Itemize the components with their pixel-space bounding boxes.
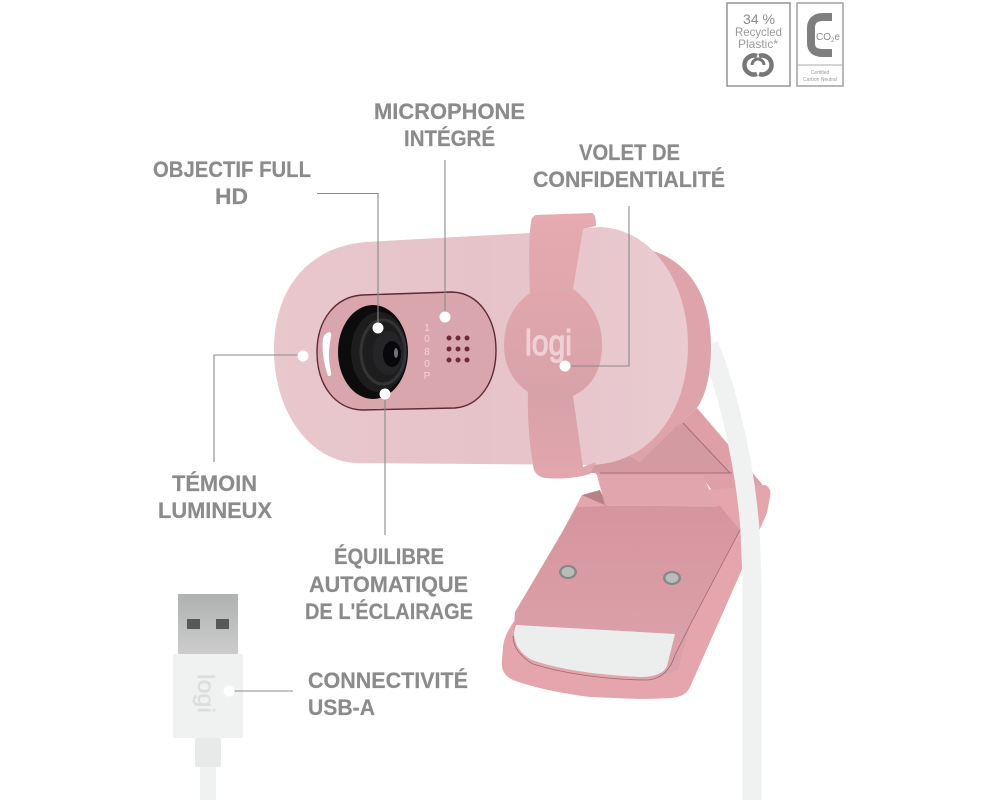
privacy shutter <box>504 213 602 478</box>
badge: 34% recycled plastic: Recycled <box>735 25 782 39</box>
callout lines <box>214 160 629 691</box>
label: privacy shutter: VOLET DE <box>579 140 680 165</box>
label: usb-a: USB-A <box>308 695 375 720</box>
cable <box>200 765 216 800</box>
plug housing <box>173 654 243 738</box>
stand base <box>502 485 770 699</box>
lens panel <box>317 292 496 410</box>
badge: carbon neutral: Certified <box>811 70 830 76</box>
1080P label <box>424 323 431 382</box>
front shell <box>274 227 688 465</box>
label: light: TÉMOIN <box>172 471 257 496</box>
callout dots <box>224 312 570 696</box>
label: microphone: INTÉGRÉ <box>404 126 495 151</box>
label: auto light balance: AUTOMATIQUE <box>309 572 468 597</box>
label: microphone: MICROPHONE <box>374 99 525 124</box>
label: light: LUMINEUX <box>158 498 272 523</box>
1080P label: 0 <box>424 359 430 370</box>
microphone holes <box>446 336 470 362</box>
1080P label: P <box>424 371 431 382</box>
logi logo: logi <box>193 674 219 713</box>
strain relief <box>195 738 221 767</box>
label: lens: OBJECTIF FULL <box>153 157 311 182</box>
label: usb-a <box>308 668 468 720</box>
logi logo: logi <box>525 322 572 363</box>
badge: carbon neutral: e <box>834 32 840 43</box>
cable <box>709 345 752 800</box>
label: usb-a: CONNECTIVITÉ <box>308 668 468 693</box>
label: auto light balance: ÉQUILIBRE <box>334 544 444 569</box>
rear body <box>600 250 711 462</box>
webcam <box>274 213 770 800</box>
badge: 34% recycled plastic: 34 % <box>743 11 775 27</box>
badge: carbon neutral: Carbon Neutral <box>803 77 837 83</box>
usb-a connector <box>173 594 243 800</box>
stand arm <box>587 408 765 506</box>
1080P label: 8 <box>424 347 430 358</box>
metal plug <box>178 594 238 654</box>
badge: carbon neutral: CO <box>816 32 831 43</box>
badge: 34% recycled plastic: Plastic* <box>738 37 778 51</box>
badge: carbon neutral <box>797 3 843 86</box>
label: privacy shutter <box>533 140 725 192</box>
label: auto light balance <box>305 544 473 624</box>
label: auto light balance: DE L'ÉCLAIRAGE <box>305 599 473 624</box>
label: privacy shutter: CONFIDENTIALITÉ <box>533 167 725 192</box>
label: light <box>158 471 272 523</box>
badge: 34% recycled plastic <box>727 3 790 86</box>
screws <box>559 565 681 585</box>
label: lens: HD <box>215 184 248 209</box>
label: lens <box>153 157 311 209</box>
hinge <box>597 475 717 507</box>
label: microphone <box>374 99 525 151</box>
anti-slip pad <box>514 625 675 677</box>
lens <box>338 305 408 399</box>
status light <box>323 332 331 376</box>
1080P label: 1 <box>424 323 430 334</box>
badge: carbon neutral: 2 <box>831 38 835 44</box>
1080P label: 0 <box>424 334 430 345</box>
